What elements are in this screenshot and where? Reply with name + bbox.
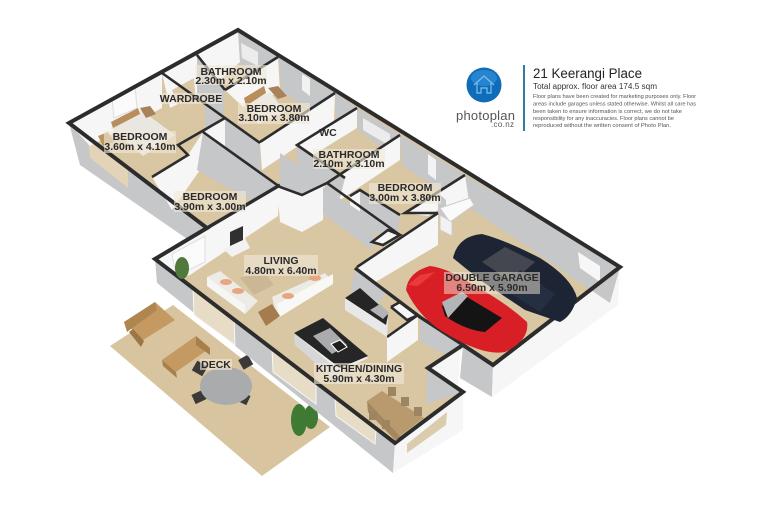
- room label: living: LIVING: [263, 255, 299, 267]
- car: dark: [453, 234, 577, 322]
- room label: double garage: DOUBLE GARAGE: [445, 272, 539, 284]
- furniture: TV and unit: [223, 226, 250, 257]
- car: red: [406, 266, 527, 353]
- laundry fixtures: [440, 198, 474, 236]
- exterior: front grey wall: [155, 259, 395, 473]
- room label: bedroom 3.10m x 3.80m: 3.10m x 3.80m: [238, 112, 310, 124]
- furniture: beds: [98, 86, 287, 156]
- logo: photoplan: [456, 68, 515, 129]
- interior wall faces: [69, 30, 620, 404]
- wall faces: wardrobe: [162, 55, 197, 108]
- kitchen counter and hob: [345, 288, 389, 337]
- room label: bedroom 3.00m x 3.80m: 3.00m x 3.80m: [369, 192, 441, 204]
- wall faces: upper bedroom: [225, 57, 280, 107]
- bench: lower: [162, 336, 210, 378]
- room label: living: 4.80m x 6.40m: [245, 265, 317, 277]
- furniture: sofas: [207, 271, 333, 326]
- kitchen island: [294, 318, 368, 385]
- room label: bathroom 2.30m x 2.10m: 2.30m x 2.10m: [195, 75, 267, 87]
- room label: bedroom 3.60m x 4.10m: BEDROOM: [113, 131, 168, 143]
- disclaimer: reproduced without the written consent of Photo Plan.: [533, 123, 671, 129]
- room label: bathroom 2.30m x 2.10m: [195, 65, 267, 87]
- house floor: [69, 30, 620, 443]
- deck: [110, 302, 330, 476]
- room label: bathroom 2.10m x 3.10m: 2.10m x 3.10m: [313, 158, 385, 170]
- room label: bedroom 3.00m x 3.80m: BEDROOM: [378, 182, 433, 194]
- property address: 21 Keerangi Place: [533, 66, 642, 81]
- room label: double garage: [444, 272, 540, 294]
- room label: kitchen/dining: KITCHEN/DINING: [316, 363, 402, 375]
- bed: upper bedroom: [244, 86, 287, 124]
- wall tops: [69, 30, 620, 443]
- room label: bedroom 3.60m x 4.10m: [104, 131, 176, 153]
- wall faces: WC and bathroom: [335, 93, 357, 130]
- room label: double garage: 6.50m x 5.90m: [456, 282, 528, 294]
- property info text: [533, 66, 696, 129]
- wall faces: lower bedroom: [400, 135, 465, 205]
- wall faces: bedroom 2 to living white wall: [155, 185, 280, 278]
- icon: house in blue circle: [466, 68, 502, 102]
- patio umbrella: [200, 367, 252, 405]
- room label: bedroom 3.10m x 3.80m: [238, 103, 310, 124]
- room label: bedroom 3.60m x 4.10m: 3.60m x 4.10m: [104, 141, 176, 153]
- plant: living corner: [175, 257, 189, 279]
- wall faces: bedroom 1: [69, 73, 162, 146]
- wall faces: garage: [465, 175, 620, 303]
- wall faces: kitchen: [350, 270, 387, 307]
- room label: living: [244, 255, 318, 277]
- patio chairs: [191, 355, 253, 405]
- wall faces: bedroom 2: [152, 132, 203, 210]
- disclaimer: responsibility for any inaccuracies. Floor plans cannot be: [533, 116, 674, 122]
- logo: photoplan: photoplan: [456, 108, 515, 123]
- room label: WC: WC: [319, 127, 337, 139]
- wall faces: passage to living: [277, 185, 302, 232]
- room label: bedroom 3.90m x 3.00m: 3.90m x 3.00m: [174, 201, 246, 213]
- logo: photoplan: .co.nz: [491, 120, 514, 129]
- divider line: [523, 65, 525, 131]
- room label: bathroom 2.30m x 2.10m: BATHROOM: [200, 66, 262, 78]
- exterior: kitchen end wall: [393, 392, 463, 473]
- disclaimer: been taken to ensure information is correct, we do not take: [533, 109, 682, 115]
- exterior: glazed doors: [193, 288, 376, 444]
- room label: kitchen/dining: 5.90m x 4.30m: [323, 373, 395, 385]
- floor area: Total approx. floor area 174.5 sqm: [533, 82, 657, 91]
- room label: wardrobe: WARDROBE: [160, 93, 222, 105]
- wall faces: bathroom: [197, 30, 240, 82]
- room label: bedroom 3.00m x 3.80m: [369, 182, 441, 204]
- potted plants: [291, 404, 318, 436]
- room label: kitchen/dining: [314, 363, 404, 385]
- room label: bathroom 2.10m x 3.10m: [313, 149, 385, 170]
- wall faces: corridor grey: [225, 118, 260, 178]
- room label: bedroom 3.90m x 3.00m: BEDROOM: [183, 191, 238, 203]
- disclaimer: areas include garages unless stated otherwise. Whilst all care has: [533, 102, 696, 108]
- disclaimer: [533, 94, 696, 129]
- exterior: bedroom side wall: [69, 123, 207, 243]
- bench: upper: [124, 302, 175, 347]
- rug: [240, 270, 274, 295]
- room label: deck: DECK: [201, 359, 231, 371]
- dining table and chairs: [367, 387, 424, 441]
- room label: bedroom 3.90m x 3.00m: [174, 191, 246, 213]
- bed: bedroom 1: [98, 106, 175, 156]
- exterior walls: [69, 123, 620, 473]
- room label: bedroom 3.10m x 3.80m: BEDROOM: [247, 103, 302, 115]
- exterior: garage walls: [460, 345, 493, 397]
- room label: bathroom 2.10m x 3.10m: BATHROOM: [318, 149, 380, 161]
- disclaimer: Floor plans have been created for marketing purposes only. Floor: [533, 94, 696, 100]
